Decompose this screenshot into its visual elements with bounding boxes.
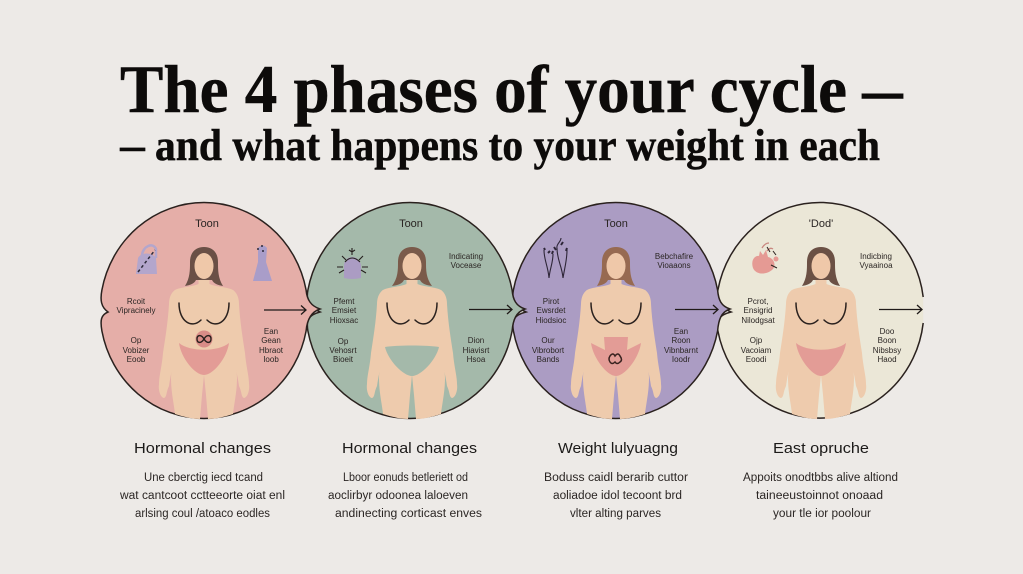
title: The 4 phases of your cycle [120, 51, 847, 127]
phase 4 labels: Haod [877, 355, 897, 364]
phase 3 title: Toon [604, 218, 628, 230]
phase 1 labels: Ean [264, 327, 278, 336]
phase 1 labels: Vipracinely [117, 306, 155, 315]
phase 3 figure [571, 247, 661, 419]
arrow 1 [264, 306, 306, 314]
phase 2 labels: Emsiet [332, 306, 357, 315]
arrow 3 [675, 305, 718, 314]
phase 2 labels: Hioxsac [330, 316, 358, 325]
column 4 text: your tle ior poolour [773, 508, 871, 520]
phase 1 labels: Rcoit [127, 297, 146, 306]
phase 1 labels: Op [131, 336, 142, 345]
panel: phase 3 circle [513, 203, 730, 419]
icon: phase 3 plants [544, 238, 567, 278]
phase 2 title: Toon [399, 218, 423, 230]
phase 3 labels: Pirot [543, 297, 560, 306]
phase 2 labels: Dion [468, 336, 484, 345]
phase 2 labels: Hsoa [467, 355, 486, 364]
phase 2 labels: Vocease [451, 261, 482, 270]
column 1 text [119, 440, 285, 520]
column 2 text: Hormonal changes [342, 440, 477, 457]
phase 1 labels: Eoob [127, 355, 146, 364]
column 1 text: wat cantcoot cctteeorte oiat enl [119, 490, 285, 502]
phase 3 labels: Ioodr [672, 355, 690, 364]
phase 3 labels [532, 252, 699, 364]
icon: uterus symbol [196, 330, 212, 348]
phase 4 labels: Doo [880, 327, 895, 336]
icon: phase 1 purple cone [253, 245, 272, 281]
column 4 text: taineeustoinnot onoaad [756, 490, 883, 502]
column 4 text [743, 440, 898, 520]
title: and what happens to your weight in each [155, 121, 880, 170]
icon: phase 1 purple bag [136, 245, 157, 274]
phase 3 labels: Our [541, 336, 555, 345]
phase 1 labels: Hbraot [259, 346, 284, 355]
phase 2 labels: Indicating [449, 252, 483, 261]
phase 1 labels: Gean [261, 336, 281, 345]
phase 1 labels: Vobizer [123, 346, 150, 355]
icon: phase 4 pink organ [752, 243, 778, 274]
column 2 text: Lboor eonuds betleriett od [343, 472, 468, 484]
phase 2 figure [367, 247, 457, 419]
panel: phase 4 circle [717, 202, 923, 419]
phase 2 labels [329, 252, 490, 364]
column 3 text: Boduss caidl berarib cuttor [544, 472, 688, 484]
phase 3 labels: Vibrobort [532, 346, 565, 355]
title: — [119, 121, 146, 170]
phase 1 labels: Ioob [263, 355, 279, 364]
title [119, 51, 904, 170]
phase 4 figure [776, 247, 866, 419]
panel: phase 2 circle [307, 203, 525, 419]
column 3 text: vlter alting parves [570, 508, 661, 520]
column 1 text: Une cberctig iecd tcand [144, 472, 263, 484]
column 2 text [328, 440, 482, 520]
phase 3 labels: Hiodsioc [536, 316, 566, 325]
phase 3 labels: Bands [537, 355, 559, 364]
phase 3 labels: Bebchafire [655, 252, 694, 261]
phase 3 labels: Roon [671, 336, 691, 345]
column 1 text: arlsing coul /atoaco eodles [135, 508, 270, 520]
phase 4 labels: Boon [878, 336, 896, 345]
phase 4 labels: Nilodgsat [741, 316, 775, 325]
phase 4 labels: Eoodi [746, 355, 766, 364]
icon: phase 2 sun dome [337, 248, 368, 279]
phase 4 labels: Vacoiam [741, 346, 772, 355]
phase 1 figure [159, 247, 249, 419]
phase 2 labels: Op [338, 337, 349, 346]
phase 4 labels: Indicbing [860, 252, 892, 261]
phase 2 labels: Hiavisrt [463, 346, 490, 355]
phase 4 labels: Pcrot, [748, 297, 768, 306]
column 3 text [544, 440, 688, 520]
phase 4 labels: Ensigrid [744, 306, 772, 315]
column 3 text: Weight lulyuagng [558, 440, 678, 457]
phase 4 title: 'Dod' [809, 218, 833, 230]
column 4 text: Appoits onodtbbs alive altiond [743, 472, 898, 484]
column 1 text: Hormonal changes [134, 440, 271, 457]
column 3 text: aoliadoe idol tecoont brd [553, 490, 682, 502]
phase 4 labels: Vyaainoa [859, 261, 893, 270]
phase 2 labels: Bioeit [333, 355, 354, 364]
column 2 text: aoclirbyr odoonea laloeven [328, 490, 468, 502]
title: — [861, 51, 904, 127]
phase 4 labels: Nibsbsy [873, 346, 901, 355]
arrow 4 [879, 305, 922, 314]
phase 1 labels [117, 297, 284, 364]
icon: phase 3 squiggle [609, 354, 622, 364]
column 2 text: andinecting corticast enves [335, 508, 482, 520]
panel: phase 1 circle [101, 203, 320, 419]
phase 1 title: Toon [195, 218, 219, 230]
column 4 text: East opruche [773, 440, 869, 457]
arrow 2 [469, 305, 512, 314]
phase 3 labels: Ewsrdet [537, 306, 566, 315]
phase 3 labels: Ean [674, 327, 688, 336]
phase 3 labels: Vibnbarnt [664, 346, 699, 355]
phase 4 labels: Ojp [750, 336, 763, 345]
phase 2 labels: Pfemt [334, 297, 355, 306]
phase 2 labels: Vehosrt [329, 346, 357, 355]
phase 4 labels [741, 252, 901, 364]
phase 3 labels: Vioaaons [657, 261, 691, 270]
